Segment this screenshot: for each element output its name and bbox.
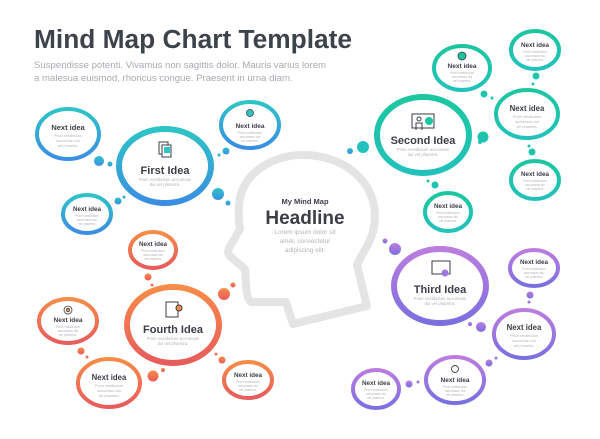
node: next idea top: Next idea (139, 241, 167, 248)
node: next idea right lower: accumsan dui (525, 183, 545, 187)
node: next idea bottom: vel pharetra. (439, 219, 457, 223)
icon: no symbol (458, 52, 466, 60)
node: next idea BL: accumsan dui (366, 392, 386, 396)
icon: documents (159, 142, 171, 157)
node: next idea left with icon: Proin vestibulum (56, 325, 80, 329)
icon: presenter (412, 114, 434, 130)
node: next idea BL (353, 370, 399, 408)
node: next idea left with icon (39, 299, 97, 343)
node: next idea top-right: Proin vestibulum (523, 50, 547, 54)
node: next idea top-right: vel pharetra. (526, 58, 544, 62)
node: next idea right lower (511, 161, 559, 199)
node: next idea BL (63, 195, 111, 233)
node: next idea mid: Proin vestibulum (513, 115, 541, 119)
head text (265, 197, 345, 254)
node: next idea with icon: Next idea (448, 63, 477, 70)
node: next idea TR: Next idea (236, 123, 265, 130)
node: next idea TL: vel pharetra. (57, 144, 79, 148)
icon: certificate (432, 261, 450, 276)
node: next idea mid (496, 90, 558, 138)
head text: Lorem ipsum dolor sit (274, 229, 336, 236)
node: next idea with icon: vel pharetra. (453, 79, 471, 83)
node: fourth idea: Fourth Idea (143, 324, 204, 336)
node: next idea TL (37, 109, 99, 159)
group: third idea (purple) (353, 238, 558, 408)
node: second idea: dui vel pharetra. (408, 152, 438, 157)
node: next idea TR: accumsan dui (240, 135, 260, 139)
node: second idea: Second Idea (391, 135, 456, 147)
node: next idea TR: accumsan dui (524, 271, 544, 275)
group: second idea (green) (377, 31, 559, 231)
node: next idea bottom (425, 193, 471, 231)
node: next idea with icon: accumsan dui (452, 75, 472, 79)
icon: head gear (452, 366, 458, 372)
node: next idea BL: Next idea (362, 380, 390, 387)
node: next idea TR: vel pharetra. (241, 139, 259, 143)
node: next idea with icon: Next idea (441, 377, 470, 384)
node: fourth idea (127, 287, 219, 363)
node: next idea with icon: Proin vestibulum (450, 71, 474, 75)
node: next idea bottom-left: vel pharetra. (98, 394, 120, 398)
node: first idea (119, 129, 211, 203)
node: next idea bottom-right: Proin vestibulum (236, 380, 260, 384)
node: next idea bottom: accumsan dui (438, 215, 458, 219)
node: next idea top (130, 232, 176, 268)
node: next idea with icon: accumsan dui (445, 389, 465, 393)
node: next idea bottom-left: Proin vestibulum (95, 384, 123, 388)
node: next idea TR: Proin vestibulum (522, 267, 546, 271)
node: third idea: dui vel pharetra. (425, 301, 455, 306)
head text: Headline (265, 208, 345, 229)
node: next idea top-right (511, 31, 559, 69)
node: next idea TR: Proin vestibulum (238, 131, 262, 135)
node: next idea TL: Next idea (51, 123, 85, 132)
title: Mind Map Chart Template (34, 24, 352, 54)
node: next idea bottom: Next idea (434, 203, 462, 210)
node: next idea top: Proin vestibulum (141, 249, 165, 253)
node: third idea (394, 249, 486, 323)
node: next idea TR: Next idea (520, 259, 548, 266)
node: next idea right lower: Next idea (521, 171, 549, 178)
node: next idea with icon (434, 46, 490, 90)
node: next idea left with icon: vel pharetra. (59, 333, 77, 337)
node: next idea mid: accumsan dui (512, 339, 536, 343)
node: second idea (377, 97, 469, 173)
node: next idea TR (221, 102, 279, 148)
node: second idea: Proin vestibulum accumsan (397, 147, 450, 152)
node: next idea mid: Next idea (507, 323, 542, 332)
subtitle: a malesua euismod, rhoncus congue. Praesent in urna diam. (34, 73, 293, 84)
subtitle (34, 60, 326, 84)
node: next idea mid: Next idea (510, 104, 545, 113)
node: next idea bottom-left (78, 359, 140, 407)
node: next idea mid: Proin vestibulum (510, 334, 538, 338)
node: next idea TR (510, 250, 558, 286)
node: third idea: Third Idea (414, 284, 467, 296)
node: next idea top: vel pharetra. (144, 257, 162, 261)
icon: globe (246, 110, 254, 116)
node: fourth idea: dui vel pharetra. (158, 341, 188, 346)
node: next idea TL: Proin vestibulum (54, 134, 82, 138)
node: next idea mid: vel pharetra. (513, 344, 535, 348)
node: next idea BL: Proin vestibulum (364, 388, 388, 392)
head text: My Mind Map (281, 197, 329, 206)
node: next idea bottom-right: accumsan dui (238, 384, 258, 388)
node: next idea bottom-right (224, 362, 272, 398)
node: next idea TL: accumsan dui (56, 139, 80, 143)
subtitle: Suspendisse potenti. Vivamus non sagittis dolor. Mauris varius lorem (34, 60, 326, 71)
node: next idea bottom: Proin vestibulum (436, 211, 460, 215)
group: fourth idea (orange) (39, 232, 272, 407)
node: next idea with icon: Proin vestibulum (443, 385, 467, 389)
node: next idea top: accumsan dui (143, 253, 163, 257)
head text: adipiscing elit. (285, 247, 325, 254)
node: next idea mid: vel pharetra. (516, 125, 538, 129)
node: next idea top-right: accumsan dui (525, 54, 545, 58)
node: next idea BL: vel pharetra. (78, 222, 96, 226)
node: first idea: dui vel pharetra. (150, 182, 180, 187)
node: next idea BL: vel pharetra. (367, 396, 385, 400)
node: next idea with icon (426, 357, 484, 403)
node: next idea with icon: vel pharetra. (446, 393, 464, 397)
node: next idea bottom-right: Next idea (234, 372, 262, 379)
node: next idea BL: accumsan dui (77, 218, 97, 222)
node: next idea left with icon: accumsan dui (58, 329, 78, 333)
node: next idea mid: accumsan dui (515, 120, 539, 124)
icon: document search (166, 302, 182, 317)
node: next idea BL: Next idea (73, 206, 101, 213)
head outline (228, 155, 375, 324)
node: next idea TR: vel pharetra. (525, 275, 543, 279)
node: third idea: Proin vestibulum accumsan (414, 296, 467, 301)
node: next idea left with icon: Next idea (54, 317, 83, 324)
node: next idea bottom-left: Next idea (92, 373, 127, 382)
group: first idea (blue) (37, 102, 369, 233)
head text: amet, consectetur (280, 238, 331, 245)
node: next idea bottom-right: vel pharetra. (239, 388, 257, 392)
node: next idea bottom-left: accumsan dui (97, 389, 121, 393)
node: fourth idea: Proin vestibulum accumsan (147, 336, 200, 341)
node: first idea: Proin vestibulum accumsan (139, 177, 192, 182)
icon: target (64, 306, 72, 314)
node: first idea: First Idea (141, 165, 190, 177)
node: next idea BL: Proin vestibulum (75, 214, 99, 218)
node: next idea mid (494, 310, 554, 358)
node: next idea right lower: Proin vestibulum (523, 179, 547, 183)
node: next idea right lower: vel pharetra. (526, 187, 544, 191)
node: next idea top-right: Next idea (521, 42, 549, 49)
